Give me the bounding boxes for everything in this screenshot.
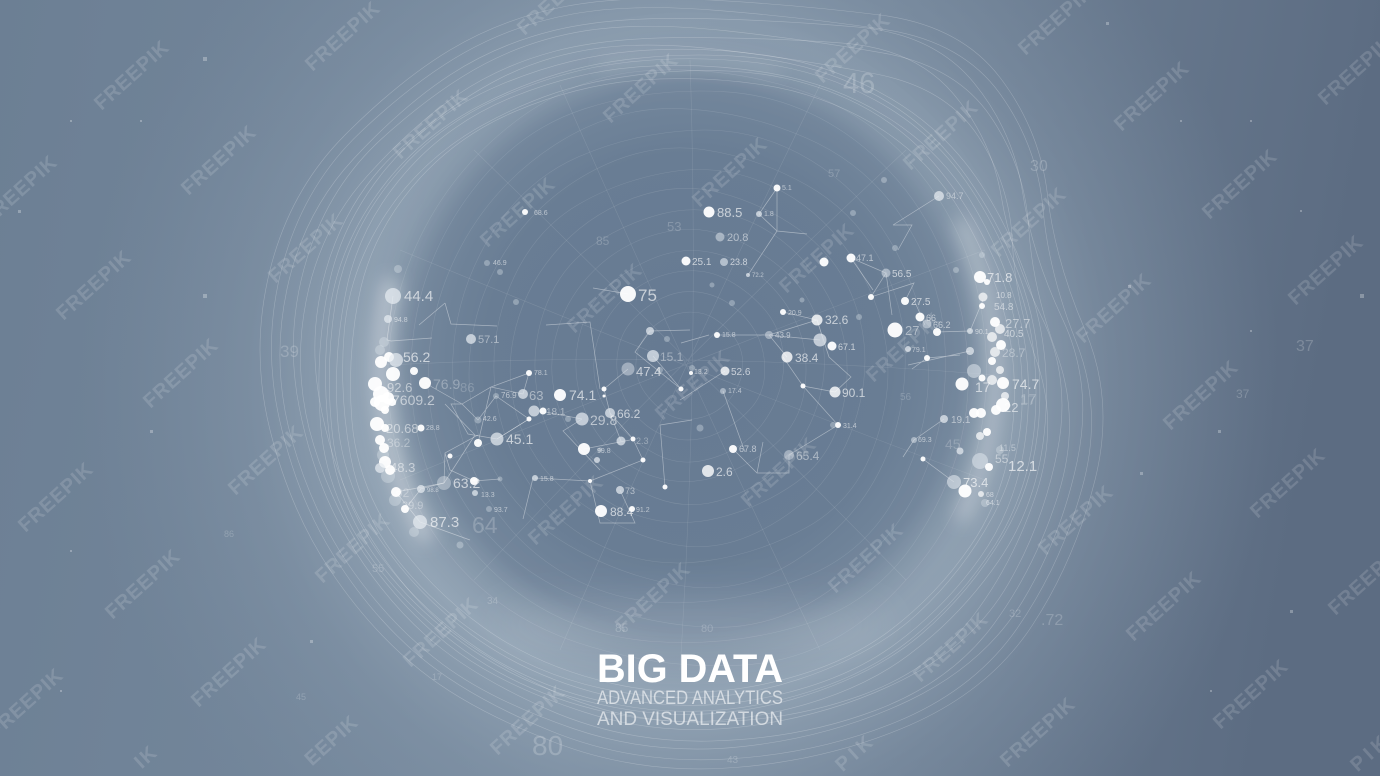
watermark grid: FREEPIK xyxy=(1284,231,1368,310)
central nodes right half: 1.8 xyxy=(764,211,774,218)
right bright node arc xyxy=(947,252,1039,507)
right bright node arc: 54.8 xyxy=(994,302,1014,313)
central nodes right half: 20.9 xyxy=(788,310,802,317)
watermark grid: PIK xyxy=(831,731,878,776)
watermark grid: FREEPIK xyxy=(90,36,174,115)
central nodes right half: 88.5 xyxy=(717,205,742,220)
central nodes right half: 47.1 xyxy=(856,253,874,263)
watermark grid: FREEPIK xyxy=(476,173,560,252)
central nodes left half: 74.1 xyxy=(569,387,596,403)
right bright node arc: 64.1 xyxy=(986,500,1000,507)
central nodes right half: 66 xyxy=(926,313,936,323)
watermark grid: FREEPIK xyxy=(139,334,223,413)
central nodes left half: 78.1 xyxy=(534,370,548,377)
central nodes left half: 75 xyxy=(638,286,657,305)
watermark grid: FREEPIK xyxy=(811,9,895,88)
watermark grid: FREEPIK xyxy=(187,633,271,712)
right bright node arc: 12.1 xyxy=(1008,458,1037,475)
faint floating numbers: 85 xyxy=(596,234,610,248)
right bright node arc: 73.4 xyxy=(963,475,988,490)
faint floating numbers: 55 xyxy=(372,563,384,575)
central nodes right half: 52.6 xyxy=(731,367,751,378)
watermark grid: FREEPIK xyxy=(737,433,821,512)
watermark grid: FREEPIK xyxy=(996,693,1080,772)
central nodes left half: 46.9 xyxy=(493,260,507,267)
watermark grid: FREEPIK xyxy=(101,545,185,624)
central nodes left half: 45.1 xyxy=(506,431,533,447)
central nodes right half: 94.7 xyxy=(946,191,964,201)
left bright node arc xyxy=(368,265,431,537)
central nodes right half: 31.4 xyxy=(843,423,857,430)
central nodes left half: 63.2 xyxy=(453,475,480,491)
central nodes left half: 47.4 xyxy=(636,364,661,379)
faint floating numbers: 17 xyxy=(432,672,442,682)
title: BIG DATA xyxy=(597,647,783,691)
central nodes left half: 29.8 xyxy=(590,412,617,428)
central nodes right half: 23.8 xyxy=(730,257,748,267)
watermark grid: FREEPIK xyxy=(775,219,859,298)
right bright node arc: 17 xyxy=(1020,392,1036,408)
left arc labels: 28.8 xyxy=(426,425,440,432)
watermark grid: FREEPIK xyxy=(651,346,735,425)
central nodes right half: 19.1 xyxy=(951,415,971,426)
central nodes left half: 76.9 xyxy=(501,391,517,400)
right bright node arc: 10.8 xyxy=(996,291,1012,300)
central nodes right half: 43.9 xyxy=(775,331,791,340)
watermark grid: FREEPIK xyxy=(311,509,395,588)
faint floating numbers: 37 xyxy=(1296,338,1314,355)
right bright node arc: 11.5 xyxy=(999,443,1016,453)
watermark grid: FREEPIK xyxy=(909,608,993,687)
central nodes left half xyxy=(418,209,695,548)
central nodes right half: 38.4 xyxy=(795,351,819,365)
faint floating numbers: 45 xyxy=(296,692,306,702)
right bright node arc: 74.7 xyxy=(1012,376,1039,392)
faint floating numbers: 37 xyxy=(1236,387,1250,401)
central nodes right half xyxy=(689,177,989,479)
watermark grid: IK xyxy=(130,742,162,773)
central nodes right half: 67.8 xyxy=(739,444,757,454)
watermark grid: FREEPIK xyxy=(1072,269,1156,348)
watermark grid: FREEPIK xyxy=(1246,444,1330,523)
left arc labels: 36.2 xyxy=(387,436,411,450)
faint floating numbers: .72 xyxy=(1041,612,1063,629)
faint floating numbers: 86 xyxy=(460,380,474,395)
right bright node arc: 40.5 xyxy=(1004,329,1024,340)
faint floating numbers: 30 xyxy=(1030,158,1048,175)
inner contour lines xyxy=(359,41,1016,693)
central nodes left half: 18.1 xyxy=(546,407,566,418)
left arc labels: 56.2 xyxy=(403,349,430,365)
faint floating numbers: 80 xyxy=(701,623,713,635)
watermark grid: FREEPIK xyxy=(611,558,695,637)
right bright node arc: 22 xyxy=(1004,400,1018,415)
faint floating numbers: 80 xyxy=(532,730,563,761)
central nodes left half: 42.6 xyxy=(483,416,497,423)
watermark grid: FREEPIK xyxy=(399,593,483,672)
watermark grid: FREEPIK xyxy=(1159,356,1243,435)
watermark grid: FREEPIK xyxy=(224,421,308,500)
watermark grid: FREEPIK xyxy=(899,96,983,175)
right bright node arc: 17 xyxy=(975,379,991,395)
subtitle xyxy=(597,687,783,730)
left arc labels: 44.4 xyxy=(404,288,433,305)
watermark grid: FREEPIK xyxy=(524,471,608,550)
central nodes right half: 17.4 xyxy=(728,388,742,395)
central nodes right half: 79.1 xyxy=(912,347,926,354)
central nodes right half: 25.1 xyxy=(692,257,712,268)
watermark grid: FREEPIK xyxy=(1034,481,1118,560)
watermark grid: FREEPIK xyxy=(862,308,946,387)
left arc labels: 87.3 xyxy=(430,514,459,531)
watermark grid: FREEPIK xyxy=(688,133,772,212)
watermark grid: FREEPIK xyxy=(824,519,908,598)
central nodes right half: 67.1 xyxy=(838,342,856,352)
watermark grid: FREEPIK xyxy=(486,681,570,760)
central nodes right half: 13.2 xyxy=(694,369,708,376)
central nodes right half: 15.8 xyxy=(722,332,736,339)
watermark grid: FREEPIK xyxy=(14,458,98,537)
watermark grid: FREEPIK xyxy=(563,259,647,338)
left arc labels xyxy=(386,288,460,531)
central nodes left half: 68.6 xyxy=(534,210,548,217)
right bright node arc: 68 xyxy=(986,492,994,499)
faint floating numbers xyxy=(224,68,1314,766)
central nodes right half: 72.2 xyxy=(752,273,764,279)
subtitle: ADVANCED ANALYTICS xyxy=(597,687,783,709)
central nodes right half: 5.1 xyxy=(782,185,792,192)
watermark grid: FREEPIK xyxy=(1122,567,1206,646)
watermark grid: FREEPIK xyxy=(177,121,261,200)
central nodes left half: 63 xyxy=(529,388,543,403)
faint floating numbers: 17 xyxy=(1020,391,1037,408)
faint floating numbers: 53 xyxy=(667,219,681,234)
faint floating numbers: 86 xyxy=(224,529,234,539)
faint floating numbers: 64 xyxy=(472,512,498,538)
central nodes right half: 90.1 xyxy=(975,329,989,336)
watermark grid: EEPIK xyxy=(301,711,363,770)
faint floating numbers: 43 xyxy=(727,755,739,766)
central nodes left half: 57.1 xyxy=(478,334,499,346)
central nodes right half: 2.6 xyxy=(716,465,733,479)
central nodes left half: 2.3 xyxy=(636,436,649,446)
central nodes left half: 88.4 xyxy=(610,505,634,519)
central nodes right half: 65.4 xyxy=(796,449,820,463)
central nodes right half: 27.5 xyxy=(911,297,931,308)
watermark grid: FREEPIK xyxy=(264,209,348,288)
left arc labels: 94.8 xyxy=(394,317,408,324)
watermark grid: FREEPIK xyxy=(1198,145,1282,224)
watermark grid: FREEPIK xyxy=(52,246,136,325)
watermark grid: FREEPIK xyxy=(599,49,683,128)
right bright node arc: 28.7 xyxy=(1002,346,1026,360)
central nodes left half: 73 xyxy=(625,486,635,496)
right bright node arc: 71.8 xyxy=(987,270,1012,285)
left arc labels: 29.9 xyxy=(402,500,423,512)
watermark grid: FREEPIK xyxy=(987,183,1071,262)
central nodes left half: 93.7 xyxy=(494,507,508,514)
central nodes right half: 56.5 xyxy=(892,269,912,280)
watermark grid: FREEPIK xyxy=(1209,655,1293,734)
central nodes right half: 32.6 xyxy=(825,313,849,327)
watermark grid: FREEPIK xyxy=(1110,57,1194,136)
central nodes right half: 20.8 xyxy=(727,232,748,244)
faint floating numbers: 45 xyxy=(945,436,961,452)
glowing ring xyxy=(382,50,995,660)
faint floating numbers: 85 xyxy=(615,621,629,635)
connection lines xyxy=(387,188,983,540)
faint floating numbers: 46 xyxy=(843,68,875,100)
left arc labels: 98.8 xyxy=(427,488,439,494)
faint floating numbers: 32 xyxy=(1009,608,1021,620)
right bright node arc: 55 xyxy=(995,452,1009,466)
central nodes right half: 27 xyxy=(905,323,919,338)
outer contour lines xyxy=(260,0,1103,770)
left arc labels: 48.3 xyxy=(390,460,415,475)
left arc labels: 7609.2 xyxy=(392,392,435,408)
left arc labels: 76.9 xyxy=(433,376,460,392)
central nodes left half: 99.8 xyxy=(597,448,611,455)
right bright node arc: 27.7 xyxy=(1005,316,1030,331)
faint floating numbers: 56 xyxy=(900,392,912,403)
left arc labels: 20.68 xyxy=(386,421,419,436)
watermark grid: FREEPIK xyxy=(301,0,385,76)
central nodes left half: 13.3 xyxy=(481,492,495,499)
faint floating numbers: 39 xyxy=(280,342,299,361)
central nodes right half: 66.2 xyxy=(933,320,951,330)
watermark grid: FREEPIK xyxy=(389,85,473,164)
central nodes left half: 15.1 xyxy=(660,350,684,364)
faint floating numbers: 57 xyxy=(828,168,840,180)
left arc labels: 92.6 xyxy=(387,380,412,395)
left arc labels: 92 xyxy=(396,486,410,500)
central nodes left half: 66.2 xyxy=(617,407,641,421)
central nodes right half: 69.3 xyxy=(918,437,932,444)
central nodes right half: 90.1 xyxy=(842,386,866,400)
central nodes left half: 91.2 xyxy=(636,507,650,514)
central nodes left half: 15.8 xyxy=(540,476,554,483)
faint floating numbers: 34 xyxy=(487,596,499,607)
subtitle: AND VISUALIZATION xyxy=(597,708,783,730)
